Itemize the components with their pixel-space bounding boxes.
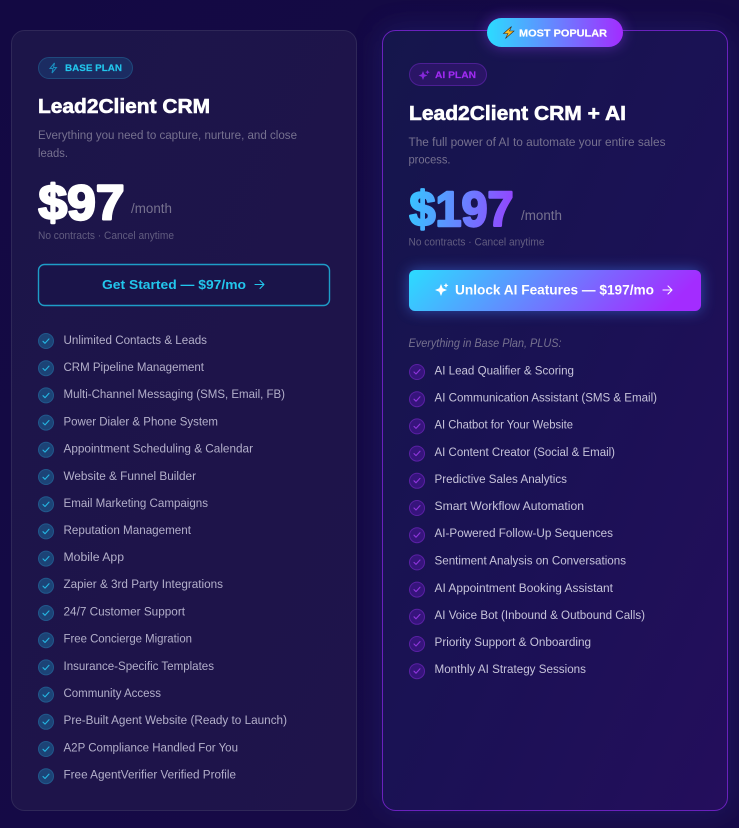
button: get started: Get Started — $97/mo — [102, 277, 246, 292]
list: AI plan features: Predictive Sales Analytics — [434, 472, 567, 486]
text: base plan description: Everything you need to capture, nurture, and close — [38, 128, 297, 142]
price: base plan: /month — [131, 201, 172, 216]
list: AI plan features: AI Voice Bot (Inbound & Outbound Calls) — [434, 608, 645, 622]
list: base plan features: Multi-Channel Messaging (SMS, Email, FB) — [64, 387, 285, 401]
list: base plan features: Free AgentVerifier Verified Profile — [64, 768, 236, 782]
text: AI plan description: process. — [408, 152, 450, 166]
price: base plan: $97 — [38, 176, 124, 230]
list: base plan features: Email Marketing Campaigns — [64, 496, 208, 510]
price: AI plan: /month — [521, 208, 562, 223]
list: AI plan features: Sentiment Analysis on Conversations — [434, 553, 626, 567]
button: get started — [38, 264, 330, 306]
list: base plan features: Mobile App — [64, 550, 124, 564]
text: base plan description: leads. — [38, 146, 68, 160]
list: base plan features: CRM Pipeline Management — [64, 360, 205, 374]
list: base plan features: A2P Compliance Handled For You — [64, 740, 238, 754]
list: base plan features: Free Concierge Migration — [64, 632, 192, 646]
panel: AI plan — [382, 18, 728, 810]
list: AI plan features: AI Communication Assistant (SMS & Email) — [434, 390, 657, 404]
button: unlock AI features: Unlock AI Features — $197/mo — [455, 282, 654, 298]
list: base plan features: Power Dialer & Phone System — [64, 414, 218, 428]
heading: AI plan name: Lead2Client CRM + AI — [409, 102, 626, 125]
list: base plan features: 24/7 Customer Support — [64, 604, 186, 618]
list: base plan features: Zapier & 3rd Party Integrations — [64, 577, 223, 591]
list: AI plan features: AI Appointment Booking Assistant — [434, 581, 614, 595]
badge: AI plan — [410, 64, 486, 86]
list: AI plan features — [410, 363, 657, 679]
list: base plan features: Website & Funnel Builder — [64, 469, 196, 483]
list: AI plan features: Monthly AI Strategy Sessions — [434, 662, 586, 676]
list: base plan features: Insurance-Specific Templates — [64, 659, 214, 673]
text: everything in base plan: Everything in Base Plan, PLUS: — [408, 337, 562, 350]
heading: base plan name: Lead2Client CRM — [38, 95, 210, 118]
badge: most popular — [487, 18, 623, 47]
list: AI plan features: Smart Workflow Automation — [434, 499, 584, 513]
list: base plan features — [38, 333, 287, 784]
list: base plan features: Unlimited Contacts & Leads — [64, 333, 207, 347]
badge: base plan — [38, 58, 132, 78]
badge: most popular: MOST POPULAR — [519, 28, 608, 40]
badge: AI plan: AI PLAN — [435, 70, 476, 81]
list: AI plan features: AI-Powered Follow-Up Sequences — [434, 526, 613, 540]
list: base plan features: Community Access — [64, 686, 161, 700]
text: base plan terms: No contracts · Cancel anytime — [38, 230, 174, 242]
list: base plan features: Appointment Scheduling & Calendar — [64, 442, 253, 456]
price: AI plan: $197 — [410, 183, 514, 237]
badge: base plan: BASE PLAN — [65, 63, 122, 74]
panel: base plan — [12, 30, 356, 810]
list: base plan features: Pre-Built Agent Website (Ready to Launch) — [64, 713, 287, 727]
text: AI plan terms: No contracts · Cancel anytime — [408, 236, 545, 248]
button: unlock AI features — [409, 270, 701, 311]
list: AI plan features: Priority Support & Onboarding — [434, 635, 591, 649]
list: AI plan features: AI Content Creator (Social & Email) — [434, 445, 615, 459]
price: base plan — [38, 176, 172, 230]
list: AI plan features: AI Chatbot for Your Website — [434, 418, 573, 432]
list: base plan features: Reputation Management — [64, 523, 192, 537]
list: AI plan features: AI Lead Qualifier & Scoring — [434, 363, 574, 377]
text: AI plan description: The full power of AI to automate your entire sales — [408, 135, 666, 149]
